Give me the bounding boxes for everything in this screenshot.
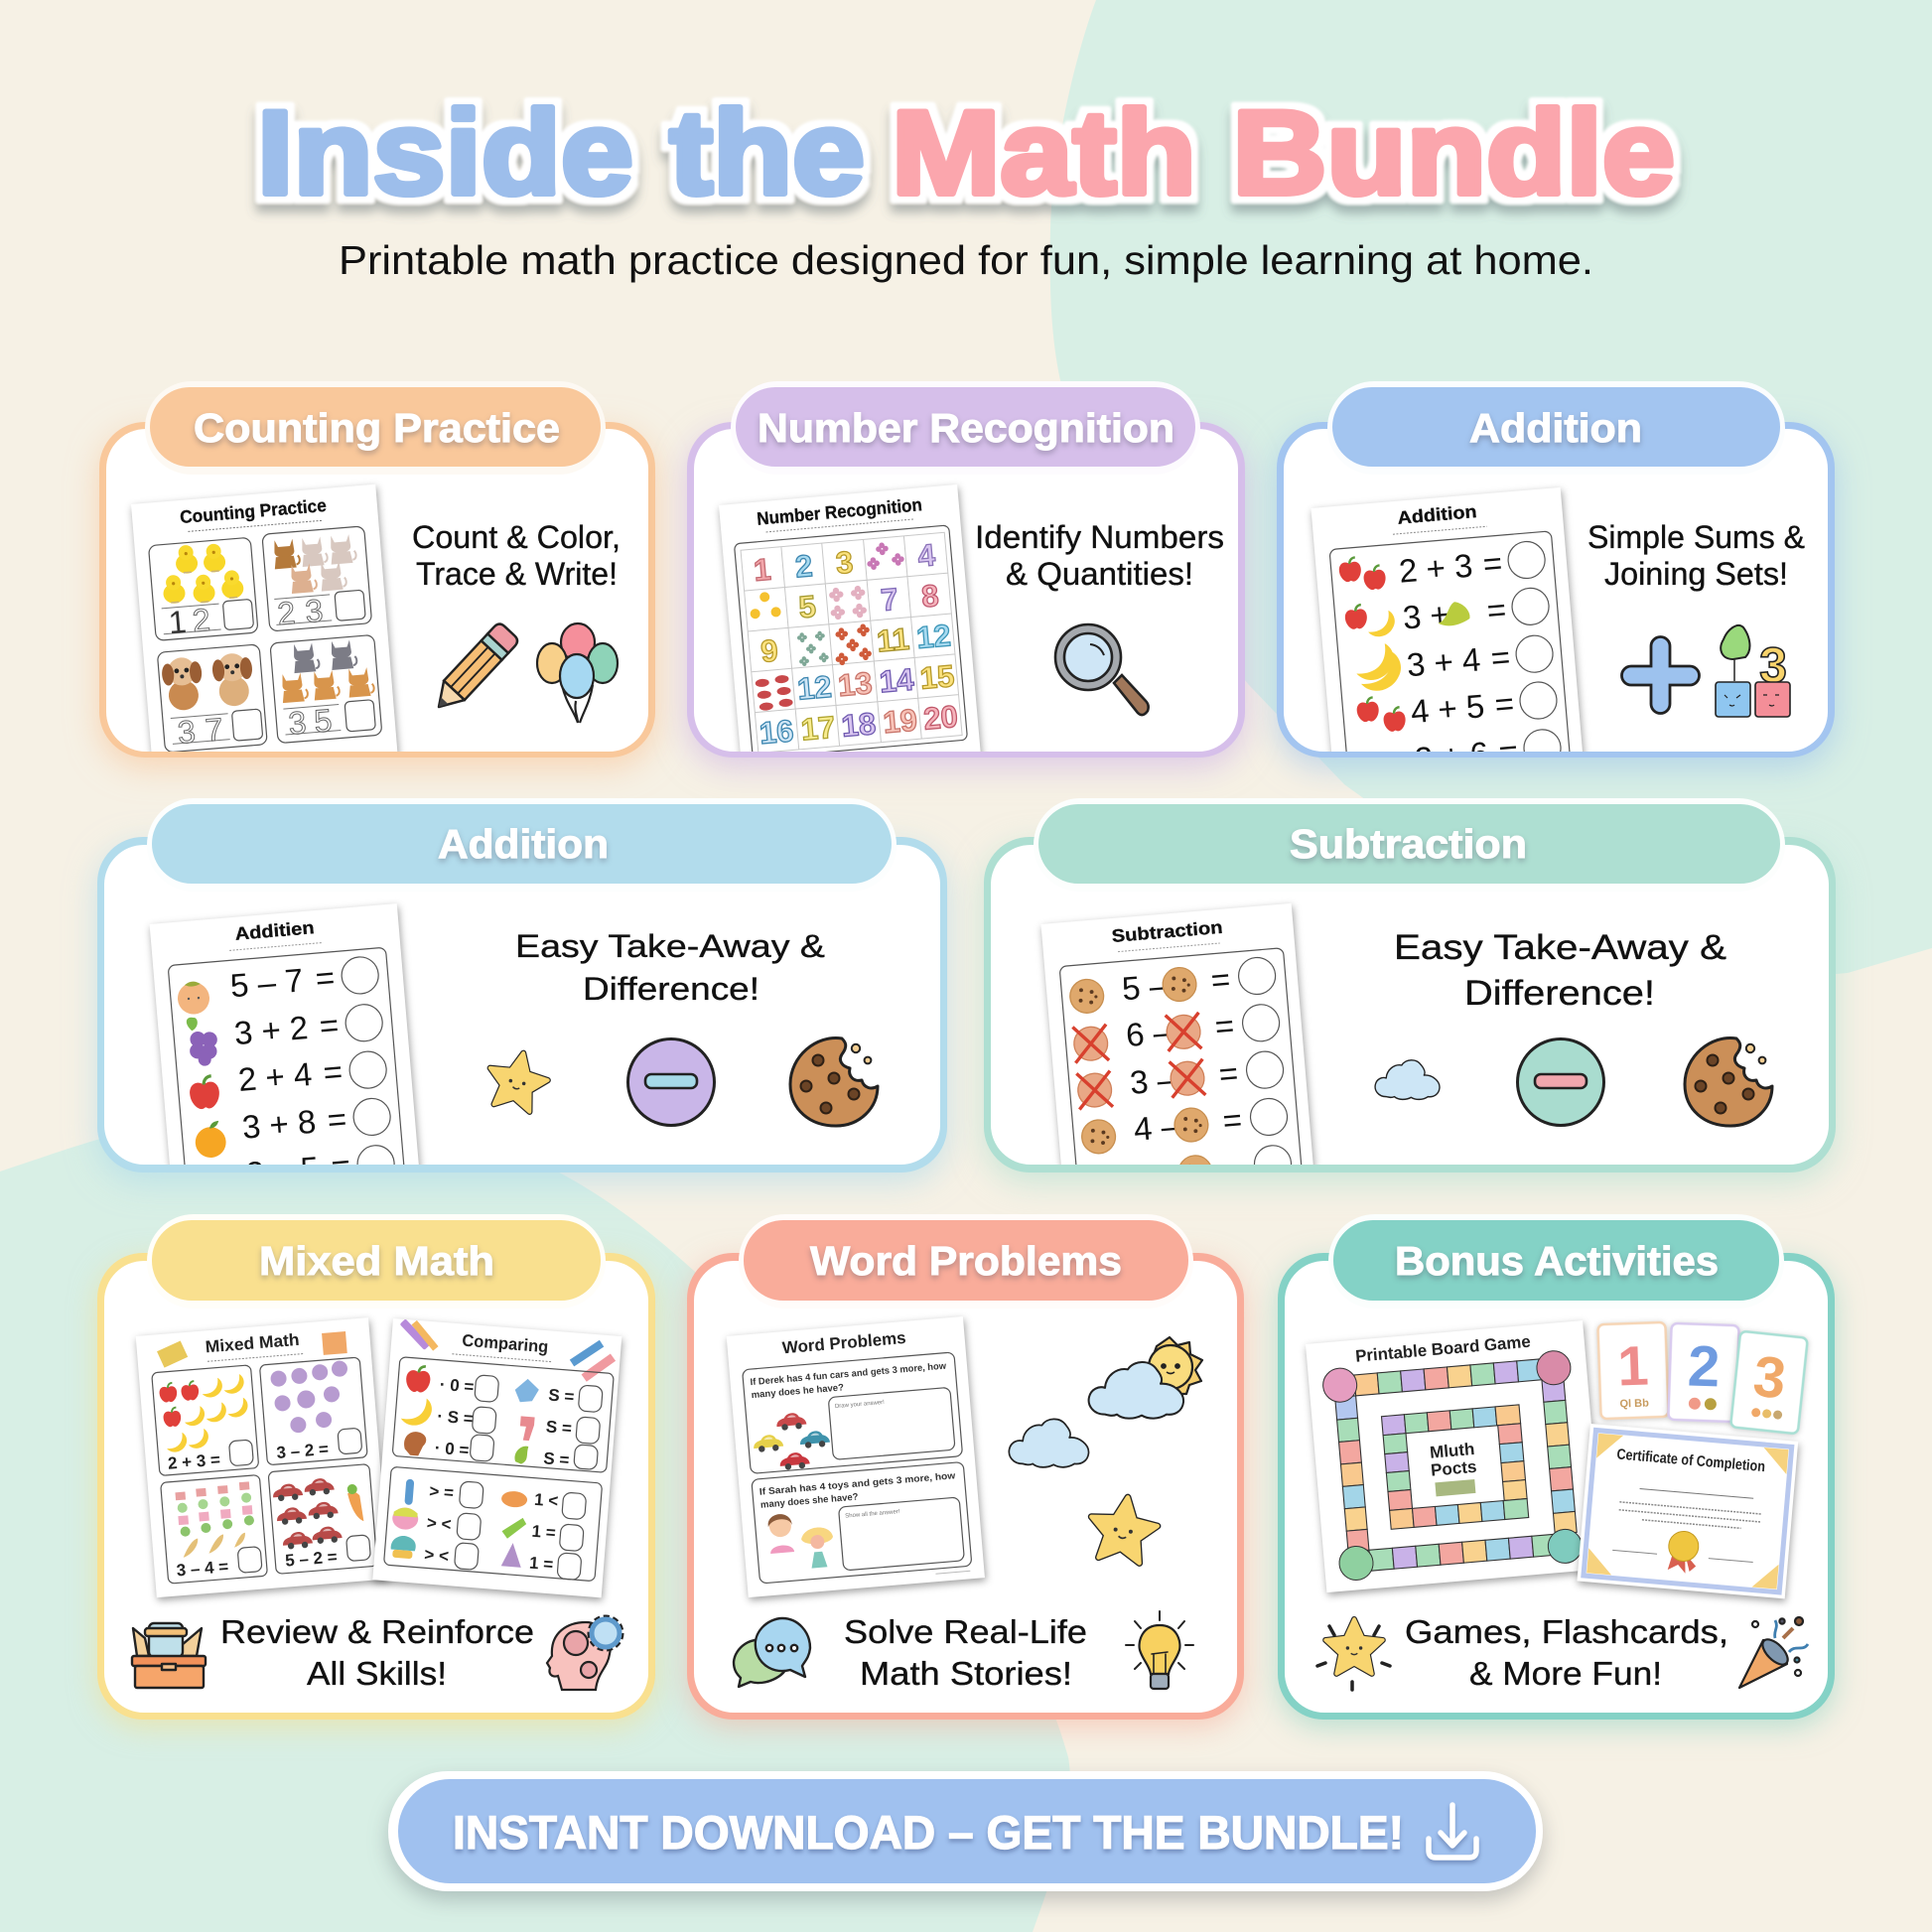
worksheet: counting practice: 7 — [204, 711, 224, 749]
worksheet: mixed math: 5 – 2 = — [285, 1547, 338, 1571]
worksheet: number grid: 15 — [918, 658, 956, 696]
title — [257, 86, 1675, 219]
caption: Easy Take-Away & — [515, 928, 825, 964]
flashcard 2 — [1668, 1323, 1739, 1422]
worksheet: number grid: 12 — [796, 669, 833, 707]
worksheet: number grid: 14 — [878, 662, 916, 700]
worksheet: comparing: · 0 = — [439, 1375, 475, 1397]
worksheet: number grid: 18 — [840, 706, 878, 744]
icon: balloons — [537, 623, 618, 723]
header pill — [147, 1214, 606, 1309]
caption: Games, Flashcards, — [1405, 1613, 1728, 1650]
card frame — [984, 837, 1836, 1173]
worksheet: number grid — [715, 483, 987, 752]
worksheet: addition: = — [1481, 544, 1504, 583]
worksheet: mixed math — [136, 1317, 389, 1597]
worksheet: addition rows: 3 + 2 — [233, 1009, 310, 1051]
flashcard 2: 2 — [1687, 1333, 1721, 1400]
caption: Count & Color, — [412, 519, 621, 555]
header pill — [731, 381, 1200, 475]
worksheet: number grid: 2 — [794, 548, 814, 584]
flashcard 1: Ql Bb — [1619, 1397, 1649, 1410]
caption: All Skills! — [307, 1655, 447, 1692]
worksheet: comparing: · 0 = — [434, 1439, 470, 1459]
worksheet: addition rows: 5 – 7 — [229, 961, 305, 1004]
certificate — [1577, 1424, 1798, 1598]
flashcard 3 — [1730, 1331, 1808, 1434]
worksheet: board game: Printable Board Game — [1354, 1332, 1531, 1366]
worksheet: addition: 3 + — [1401, 596, 1450, 636]
header pill: Addition — [438, 821, 609, 867]
worksheet: comparing: > < — [424, 1545, 450, 1566]
icon: plus sign — [1622, 637, 1700, 713]
icon: speech bubbles — [734, 1618, 810, 1687]
worksheet: word problems: Show all the answer! — [845, 1509, 900, 1520]
icon: head with gears — [547, 1619, 620, 1690]
worksheet: number grid: 20 — [922, 699, 959, 737]
worksheet: addition: = — [1489, 638, 1512, 676]
icon: toolbox — [132, 1623, 206, 1688]
worksheet: addition rows: 2 – 5 — [244, 1150, 321, 1192]
icon: large cloud — [1089, 1362, 1183, 1419]
worksheet: number grid: 4 — [916, 537, 937, 574]
worksheet: number grid: 13 — [837, 665, 874, 703]
caption — [975, 519, 1224, 592]
worksheet: addition — [1308, 485, 1588, 752]
worksheet: word problems: If Sarah has 4 toys and gets 3 more, how — [759, 1470, 956, 1498]
worksheet: subtraction: 6 – — [1125, 1013, 1173, 1053]
caption: Easy Take-Away & — [1394, 928, 1726, 967]
caption: Identify Numbers — [975, 519, 1224, 555]
header pill: Addition — [1469, 405, 1642, 451]
worksheet: comparing: Comparing — [462, 1331, 549, 1356]
panel: word problems — [687, 1214, 1244, 1720]
card frame — [97, 837, 947, 1173]
icon: magnifying glass — [1055, 624, 1149, 715]
worksheet: counting practice: 1 — [167, 604, 188, 640]
worksheet: addition rows — [150, 903, 425, 1254]
icon: star with sparkles — [1317, 1619, 1390, 1690]
worksheet: comparing — [372, 1317, 621, 1597]
worksheet: number grid: 3 — [834, 545, 855, 581]
download button — [388, 1771, 1543, 1891]
card frame — [97, 1253, 655, 1720]
caption: Difference! — [1464, 974, 1655, 1013]
worksheet: comparing: S = — [545, 1417, 573, 1438]
button shape — [388, 1771, 1543, 1891]
worksheet: comparing: S = — [543, 1449, 570, 1469]
worksheet: word problems: If Derek has 4 fun cars and gets 3 more, how — [750, 1361, 947, 1388]
caption — [1394, 928, 1726, 1013]
header pill: Mixed Math — [259, 1238, 494, 1284]
card frame — [99, 422, 655, 758]
worksheet: word problems — [727, 1316, 985, 1597]
worksheet: subtraction: Subtraction — [1111, 917, 1223, 946]
worksheet: subtraction: 3 – — [1129, 1060, 1177, 1101]
worksheet: addition rows: = — [322, 1052, 344, 1091]
header pill — [147, 798, 897, 892]
panel: bonus activities — [1278, 1214, 1835, 1720]
flashcard 1 — [1597, 1322, 1669, 1419]
worksheet: number grid: 11 — [876, 621, 910, 659]
caption: Simple Sums & — [1587, 519, 1805, 555]
icon: number blocks: 3 — [1759, 637, 1787, 693]
worksheet: subtraction: 4 – — [1133, 1107, 1181, 1148]
header pill — [145, 381, 606, 475]
caption: Trace & Write! — [416, 556, 618, 592]
panel: counting practice — [99, 381, 655, 821]
worksheet: comparing: > < — [426, 1513, 452, 1534]
card frame — [1278, 1253, 1835, 1720]
panel: number recognition — [687, 381, 1245, 822]
worksheet: number grid: 7 — [880, 582, 899, 618]
worksheet: comparing: S = — [548, 1386, 575, 1407]
caption — [515, 928, 825, 1007]
header pill: Bonus Activities — [1395, 1238, 1719, 1284]
worksheet: subtraction: = — [1221, 1101, 1243, 1139]
icon: minus circle — [1517, 1038, 1604, 1126]
title: Math Bundle — [892, 86, 1675, 219]
worksheet: comparing: > = — [429, 1481, 455, 1502]
caption — [1405, 1613, 1728, 1692]
worksheet: counting practice: 2 — [276, 595, 297, 631]
worksheet: subtraction: = — [1209, 960, 1232, 999]
worksheet: counting practice: 3 — [287, 704, 308, 742]
icon: light bulb — [1126, 1611, 1193, 1689]
worksheet: comparing: · S = — [437, 1407, 475, 1429]
caption: Joining Sets! — [1604, 556, 1788, 592]
worksheet: counting practice: 5 — [313, 702, 334, 740]
header pill: Number Recognition — [758, 405, 1174, 451]
worksheet: comparing: 1 < — [533, 1490, 559, 1511]
worksheet: board game: Pocts — [1430, 1457, 1477, 1480]
worksheet: addition: = — [1485, 591, 1508, 628]
worksheet: addition: = — [1497, 732, 1519, 770]
card frame — [687, 1253, 1244, 1720]
worksheet: addition rows: = — [330, 1147, 351, 1184]
panel: mixed math — [97, 1214, 655, 1720]
worksheet: counting practice: 2 — [191, 602, 211, 638]
panel: addition — [1277, 381, 1835, 838]
icon: star — [483, 1047, 552, 1114]
worksheet: addition rows: = — [318, 1006, 341, 1044]
title: Inside the — [257, 86, 865, 219]
worksheet: counting practice: 3 — [177, 714, 197, 751]
icon: download arrow — [1429, 1805, 1476, 1858]
button label: INSTANT DOWNLOAD – GET THE BUNDLE! — [453, 1806, 1404, 1859]
caption — [412, 519, 621, 592]
worksheet: number grid: 1 — [753, 552, 772, 588]
header pill — [1327, 381, 1785, 475]
caption: Math Stories! — [860, 1655, 1072, 1692]
background shape: mint bottom left — [0, 1116, 1070, 1932]
icon: pencil — [429, 621, 520, 717]
header pill: Subtraction — [1290, 821, 1527, 867]
worksheet: addition: 2 + 6 — [1413, 735, 1490, 777]
worksheet: mixed math: Mixed Math — [205, 1330, 300, 1356]
card frame — [1277, 422, 1835, 758]
subtitle: Printable math practice designed for fun, simple learning at home. — [339, 237, 1593, 283]
worksheet: number grid: 5 — [797, 589, 817, 624]
worksheet: subtraction: 5 – — [1121, 967, 1170, 1007]
panel: addition wide — [97, 798, 947, 1254]
worksheet: board game — [1306, 1320, 1603, 1592]
worksheet: addition: Addition — [1397, 501, 1477, 528]
caption: Review & Reinforce — [220, 1613, 534, 1650]
header pill: Word Problems — [810, 1238, 1122, 1284]
worksheet: mixed math: 2 + 3 = — [167, 1450, 221, 1473]
worksheet: addition rows: 2 + 4 — [236, 1055, 314, 1098]
worksheet: mixed math: 3 – 2 = — [276, 1440, 330, 1462]
worksheet: word problems: Word Problems — [781, 1328, 906, 1357]
flashcard 1: 1 — [1616, 1333, 1650, 1398]
background shape: mint top right — [1050, 0, 1932, 975]
icon: party popper — [1739, 1617, 1808, 1688]
header pill — [1034, 798, 1785, 892]
worksheet: addition rows: = — [326, 1100, 347, 1139]
worksheet: number grid: 8 — [920, 578, 940, 614]
worksheet: number grid: 16 — [758, 713, 795, 751]
caption — [1587, 519, 1805, 592]
worksheet: addition rows: 3 + 8 — [240, 1103, 318, 1146]
worksheet: subtraction — [1040, 903, 1319, 1255]
caption — [844, 1613, 1087, 1692]
icon: cookie — [790, 1038, 878, 1126]
header pill — [739, 1214, 1193, 1309]
flashcard 3: 3 — [1750, 1344, 1789, 1412]
certificate: Certificate of Completion — [1616, 1446, 1766, 1475]
worksheet: addition rows: Additien — [234, 917, 315, 944]
worksheet: mixed math: 3 – 4 = — [176, 1557, 229, 1580]
panel: subtraction — [984, 798, 1836, 1255]
icon: star — [1086, 1492, 1161, 1565]
icon: sun — [1149, 1337, 1202, 1394]
worksheet: counting practice: 3 — [304, 593, 325, 629]
icon: cloud — [1375, 1060, 1440, 1099]
header pill — [1328, 1214, 1784, 1309]
worksheet: word problems: many does she have? — [760, 1491, 859, 1511]
icon: number blocks — [1716, 625, 1790, 717]
worksheet: number grid: 9 — [759, 632, 779, 669]
worksheet: subtraction: = — [1213, 1007, 1236, 1045]
caption: Difference! — [583, 971, 759, 1007]
caption — [220, 1613, 534, 1692]
icon: small cloud — [1009, 1419, 1089, 1467]
header pill: Counting Practice — [194, 405, 560, 451]
flashcards — [1597, 1322, 1808, 1434]
worksheet: addition: 4 + 5 — [1409, 687, 1486, 730]
worksheet: word problems: Draw your answer! — [835, 1400, 885, 1410]
worksheet: word problems: many does he have? — [751, 1382, 845, 1401]
worksheet: addition rows: = — [314, 959, 337, 997]
caption: & More Fun! — [1469, 1655, 1662, 1692]
worksheet: comparing: 1 = — [528, 1554, 554, 1574]
worksheet: number grid: 17 — [799, 710, 837, 748]
caption: Solve Real-Life — [844, 1613, 1087, 1650]
worksheet: number grid: Number Recognition — [756, 494, 923, 529]
worksheet: addition: 3 + 4 — [1406, 640, 1482, 683]
worksheet: comparing: 1 = — [531, 1522, 556, 1542]
worksheet: board game: Mluth — [1429, 1440, 1475, 1462]
worksheet: addition: = — [1493, 685, 1515, 723]
caption: & Quantities! — [1006, 556, 1193, 592]
worksheet: number grid: 12 — [915, 618, 952, 655]
worksheet: addition: 2 + 3 — [1398, 547, 1474, 590]
icon: cookie — [1685, 1038, 1772, 1126]
worksheet: counting practice — [127, 483, 403, 752]
icon: minus circle — [627, 1038, 715, 1126]
worksheet: number grid: 19 — [882, 702, 918, 740]
worksheet: counting practice: Counting Practice — [179, 495, 328, 527]
card frame — [687, 422, 1245, 758]
worksheet: subtraction: = — [1217, 1054, 1240, 1092]
